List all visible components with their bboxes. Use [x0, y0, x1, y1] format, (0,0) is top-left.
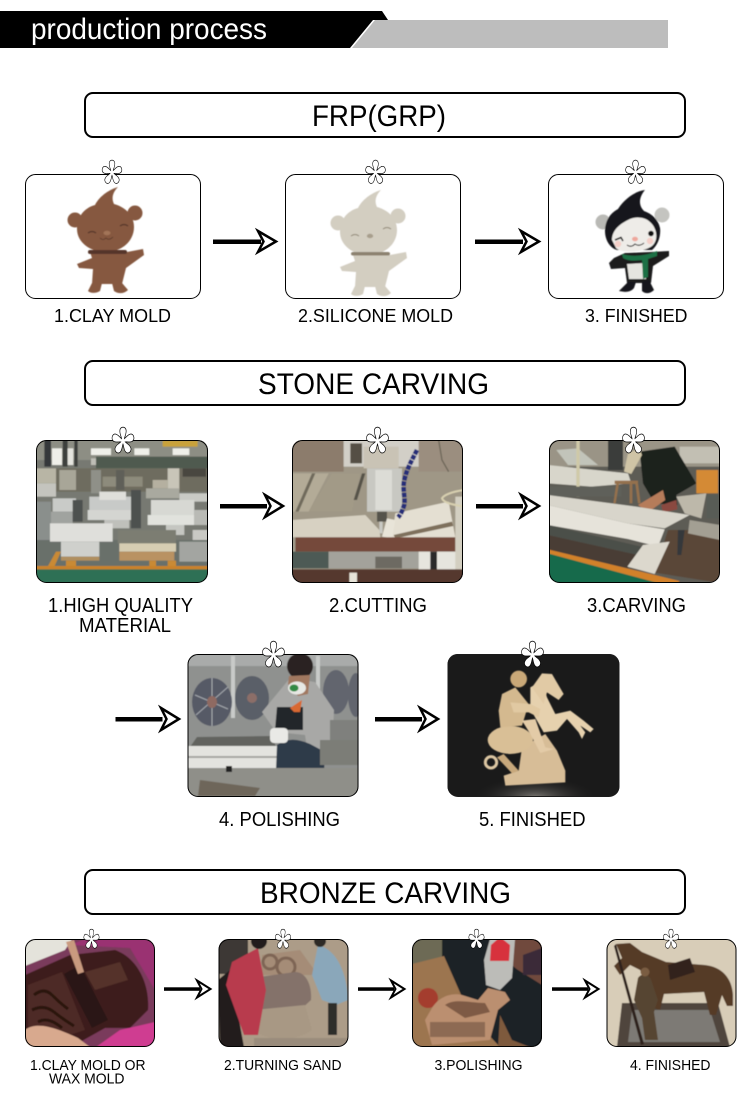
photo frame	[607, 940, 736, 1046]
header banner	[0, 11, 668, 48]
arrow	[476, 495, 539, 517]
photo: rider statue	[447, 654, 620, 797]
heading: FRP(GRP)	[85, 93, 685, 137]
step: 1 clay or wax mold	[25, 930, 155, 1088]
banner title: production process	[31, 13, 267, 46]
step: 1 high quality material	[36, 428, 208, 637]
arrow	[213, 231, 276, 252]
photo: carved mold	[25, 939, 155, 1047]
photo: painted mascot	[596, 190, 670, 293]
photo: worker polishing	[187, 653, 364, 797]
label: 5. FINISHED	[479, 808, 586, 831]
icon: flower mark	[663, 930, 679, 949]
arrow	[220, 495, 283, 517]
icon: flower mark	[521, 642, 544, 668]
label: MATERIAL	[79, 614, 171, 637]
label: 3.POLISHING	[434, 1057, 522, 1074]
photo: polishing bronze	[412, 937, 543, 1047]
photo frame	[550, 440, 720, 582]
arrow	[164, 980, 210, 998]
photo frame	[219, 940, 348, 1046]
photo: silicone mascot	[330, 190, 407, 296]
arrow	[552, 980, 598, 998]
step: 2 turning sand	[218, 930, 349, 1074]
photo frame	[292, 440, 462, 582]
heading: BRONZE CARVING	[85, 870, 685, 914]
photo: worker carving slab	[548, 440, 720, 583]
label: WAX MOLD	[49, 1070, 125, 1088]
label	[48, 594, 193, 637]
icon: flower mark	[622, 428, 645, 454]
label: 3. FINISHED	[585, 305, 688, 326]
label: 1.HIGH QUALITY	[48, 594, 193, 617]
arrow	[116, 708, 179, 730]
label: 4. POLISHING	[219, 808, 340, 831]
label: 1.CLAY MOLD OR	[30, 1057, 146, 1074]
label: 4. FINISHED	[630, 1057, 711, 1074]
heading: FRP(GRP): FRP(GRP)	[312, 100, 446, 133]
section: FRP (GRP) process	[26, 93, 724, 326]
photo: CNC cutter	[292, 440, 464, 583]
icon: flower mark	[275, 930, 291, 949]
arrow	[375, 708, 438, 730]
icon: flower mark	[262, 642, 285, 668]
photo: bronze horse statue	[606, 939, 737, 1047]
label: 2.SILICONE MOLD	[298, 305, 453, 326]
photo: clay mascot	[68, 187, 144, 293]
heading: STONE CARVING	[85, 361, 685, 405]
section: stone carving process	[36, 361, 720, 831]
icon: flower mark	[469, 930, 484, 949]
step: 3 polishing	[412, 930, 543, 1074]
heading: BRONZE CARVING: BRONZE CARVING	[260, 877, 511, 910]
heading: STONE CARVING: STONE CARVING	[258, 368, 489, 401]
icon: flower mark	[102, 160, 122, 184]
label	[30, 1057, 146, 1088]
arrow	[475, 231, 539, 252]
photo frame	[36, 440, 208, 582]
photo: stone block yard	[36, 440, 208, 583]
photo frame	[26, 940, 154, 1046]
icon: flower mark	[366, 428, 389, 454]
icon: flower mark	[112, 428, 134, 454]
step: 4 finished	[606, 930, 737, 1074]
photo frame	[448, 654, 619, 796]
icon: flower mark	[625, 160, 646, 184]
arrow	[358, 980, 404, 998]
icon: flower mark	[365, 160, 386, 184]
label: 2.CUTTING	[329, 594, 427, 617]
icon: flower mark	[84, 930, 99, 949]
step: 3 carving	[548, 428, 720, 617]
step: 2 silicone mold	[286, 160, 460, 326]
photo frame	[412, 940, 542, 1046]
photo: workers turning sand	[218, 933, 349, 1047]
step: 5 finished	[447, 642, 620, 831]
photo frame	[188, 654, 358, 796]
step: 1 clay mold	[26, 160, 200, 326]
step: 2 cutting	[292, 428, 464, 617]
label: 2.TURNING SAND	[224, 1057, 342, 1074]
step: 3 finished	[548, 160, 724, 326]
label: 1.CLAY MOLD	[54, 305, 171, 326]
section: bronze carving process	[25, 870, 737, 1088]
label: 3.CARVING	[587, 594, 686, 617]
step: 4 polishing	[187, 642, 364, 831]
